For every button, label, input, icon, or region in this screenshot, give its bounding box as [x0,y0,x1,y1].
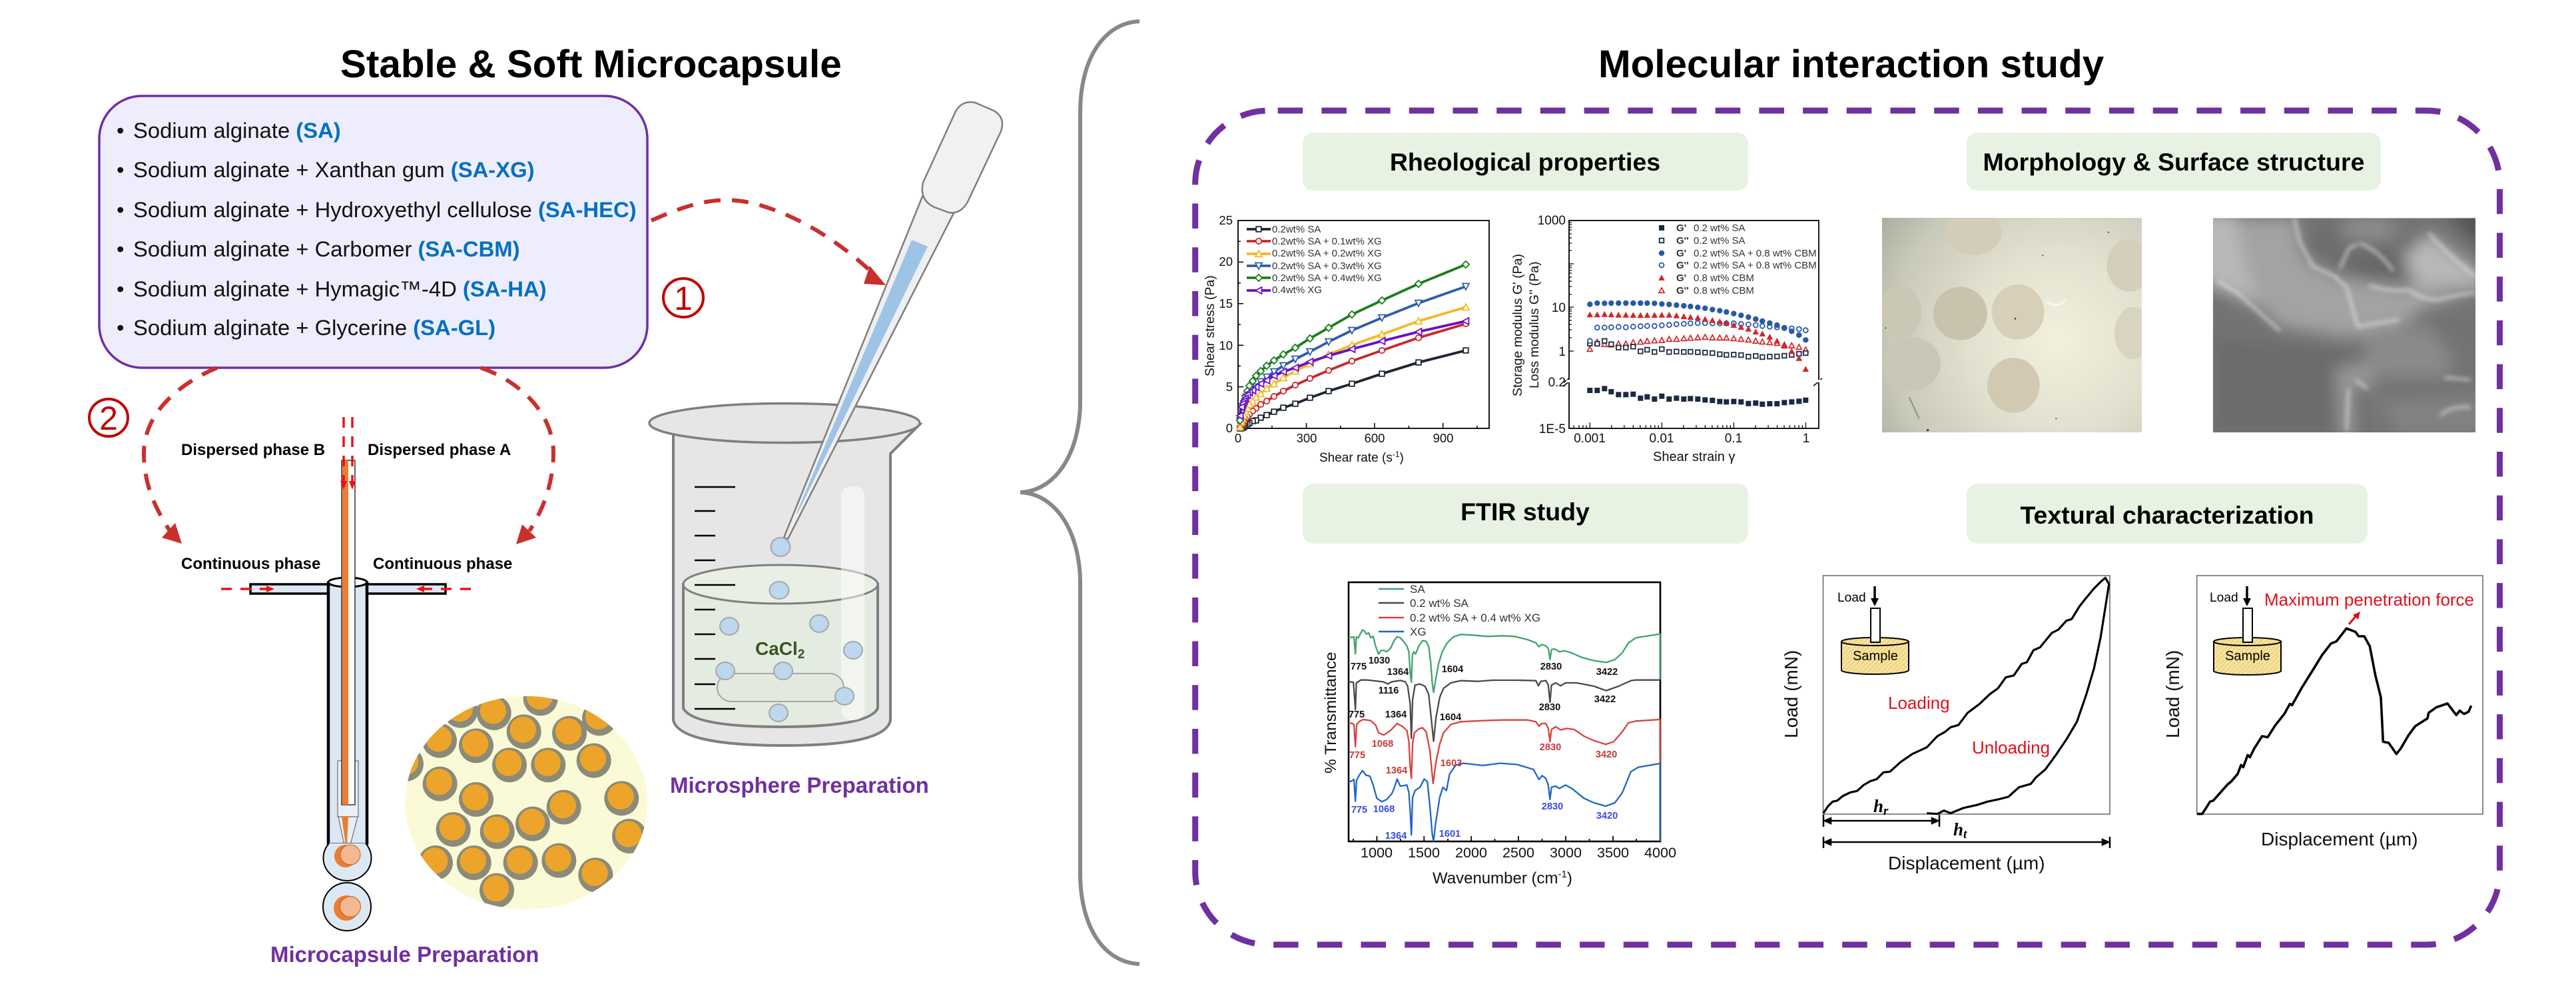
heading: FTIR study: FTIR study [1460,498,1590,526]
peak labels: red: 3420 [1596,749,1617,760]
peak labels: black: 1364 [1387,667,1409,678]
chart: FTIR spectra: 2000 [1455,844,1487,861]
axis label: shear rate: ) [1400,451,1404,465]
chart: FTIR spectra: 1000 [1361,844,1393,861]
chart: shear stress vs shear rate: 0 [1235,431,1241,445]
text block: sodium alginate formulations: • [117,237,124,261]
heading: rheological properties: Rheological properties [1390,148,1660,176]
legend: modulus series: G'' [1676,260,1689,271]
peak labels: black: 2830 [1540,662,1562,672]
label: calcium chloride: 2 [798,648,805,662]
label: loading: Loading [1888,693,1950,713]
chart: storage and loss modulus vs shear strain: 10 [1552,301,1566,315]
icon: circled number 1 [663,278,703,317]
chart: FTIR spectra: 3000 [1550,844,1582,861]
arrow: list to pipette [651,200,886,285]
chart: shear stress vs shear rate: 300 [1297,431,1317,445]
legend: shear stress series: 0.2wt% SA + 0.3wt% XG [1272,260,1382,272]
legend: modulus series: 0.2 wt% SA + 0.8 wt% CBM [1694,260,1817,271]
photo: optical micrograph of microspheres [1879,209,2152,432]
diagram: coaxial microfluidic device [181,417,512,931]
label: residual depth: h [1873,796,1883,816]
arrow: list to dispersed phase left [144,368,217,544]
chart: FTIR spectra: 1500 [1408,844,1440,861]
legend: shear stress series: 0.2wt% SA [1272,224,1321,235]
heading: microcapsule preparation: Microcapsule Preparation [270,942,539,967]
peak labels: black: 3422 [1596,667,1618,678]
legend: FTIR series: XG [1410,626,1427,638]
panel: formulation list [99,96,647,368]
text block: sodium alginate formulations: • [117,315,124,340]
chart: storage and loss modulus vs shear strain: 0.1 [1725,432,1742,446]
legend: modulus series: G' [1676,272,1686,284]
axis label: displacement: Displacement (µm) [1888,853,2045,873]
icon: load on sample, loading plot: Load [1837,591,1866,605]
legend: shear stress series [1247,224,1382,296]
icon: load on sample, loading plot: Sample [1853,649,1898,664]
chart: storage and loss modulus vs shear strain: 0.01 [1650,432,1674,446]
label: continuous phase left: Continuous phase [181,555,320,573]
legend: shear stress series: 0.4wt% XG [1272,284,1322,296]
legend: FTIR series: 0.2 wt% SA + 0.4 wt% XG [1410,612,1540,624]
photo: microcapsules micrograph [405,696,647,909]
text block: sodium alginate formulations: • [117,197,124,222]
axis label: loss modulus: Loss modulus G'' (Pa) [1527,261,1542,388]
axis label: load: Load (mN) [2162,650,2183,738]
chart: shear stress vs shear rate: 600 [1365,431,1385,445]
peak labels: red: 1068 [1372,739,1393,749]
axis label: displacement: Displacement (µm) [2261,829,2418,849]
chart: shear stress vs shear rate: 25 [1219,213,1233,227]
text block: sodium alginate formulations: Sodium alginate (SA) [133,118,341,143]
legend: shear stress series: 0.2wt% SA + 0.2wt% XG [1272,248,1382,259]
brace: connects left and right sections [1020,21,1139,964]
legend: modulus series: 0.8 wt% CBM [1694,272,1754,284]
peak labels: black: 1604 [1440,712,1462,723]
chart: storage and loss modulus vs shear strain: 1000 [1538,214,1566,228]
arrow: residual depth span [1823,815,1939,827]
axis label: shear rate: Shear rate (s [1319,451,1393,465]
icon: circled number 2: 2 [99,400,118,437]
legend: shear stress series: 0.2wt% SA + 0.1wt% XG [1272,236,1382,247]
chart: shear stress vs shear rate: 10 [1219,338,1233,352]
peak labels: black: 1030 [1369,656,1390,666]
chart: penetration force curve [2162,576,2483,849]
chart: loading and unloading curve [1781,576,2110,873]
chart: storage and loss modulus vs shear strain: 1E-5 [1539,422,1566,436]
diagram: beaker with calcium chloride bath [649,404,920,745]
text block: sodium alginate formulations: Sodium alginate + Xanthan gum (SA-XG) [133,157,535,182]
label: residual depth: r [1883,804,1889,818]
text block: sodium alginate formulations: • [117,118,124,143]
label: unloading: Unloading [1972,738,2050,757]
axis label: transmittance: % Transmittance [1322,652,1340,773]
heading: textural characterization: Textural characterization [2020,501,2314,529]
icon: circled number 2 [89,399,128,437]
photo: SEM surface micrograph [2213,218,2475,432]
chart: storage and loss modulus vs shear strain: 0.2 [1548,376,1566,390]
peak labels: blue: 1601 [1439,829,1460,839]
heading: FTIR study [1303,484,1748,544]
text block: sodium alginate formulations: Sodium alginate + Hydroxyethyl cellulose (SA-HEC) [133,197,637,222]
peak labels: red [1349,739,1617,776]
peak labels: red: 2830 [1540,742,1561,753]
legend: modulus series: 0.2 wt% SA + 0.8 wt% CBM [1694,248,1817,259]
peak labels: black [1349,656,1618,723]
peak labels: black: 2830 [1539,702,1560,713]
heading: rheological properties [1303,133,1748,191]
label: continuous phase right: Continuous phase [373,555,512,573]
peak labels: blue: 2830 [1542,801,1563,812]
axis label: storage modulus: Storage modulus G' (Pa) [1510,254,1525,396]
chart: shear stress vs shear rate: 900 [1433,431,1453,445]
peak labels: red: 1603 [1441,758,1462,769]
peak labels: black: 1364 [1385,710,1407,720]
icon: load on sample, loading plot [1837,586,1909,674]
axis label: wavenumber: Wavenumber (cm [1433,869,1558,887]
label: maximum penetration force: Maximum penetration force [2264,590,2474,610]
icon: released droplet [323,883,371,931]
chart: FTIR spectra: 3500 [1597,844,1629,861]
label: dispersed phase A: Dispersed phase A [368,441,511,459]
heading: textural characterization [1967,484,2368,544]
chart: storage and loss modulus vs shear strain: 1 [1558,345,1566,359]
icon: load on sample, penetration plot: Sample [2225,649,2270,664]
peak labels: black: 775 [1349,710,1365,720]
peak labels: black: 3422 [1594,694,1616,705]
legend: modulus series: G'' [1676,285,1689,296]
label: calcium chloride: CaCl [755,638,798,659]
panel: dashed border for molecular interaction study [1195,111,2500,945]
legend: shear stress series: 0.2wt% SA + 0.4wt% XG [1272,272,1382,284]
icon: load on sample, penetration plot: Load [2210,591,2238,605]
legend: modulus series: 0.2 wt% SA [1694,223,1746,234]
legend: modulus series: G'' [1676,235,1689,246]
axis label: wavenumber: -1 [1558,869,1567,880]
title: molecular interaction study: Molecular interaction study [1598,43,2104,86]
legend: modulus series: 0.8 wt% CBM [1694,285,1754,296]
legend: FTIR series: SA [1410,583,1425,596]
peak labels: blue: 1364 [1385,831,1407,841]
peak labels: black: 1116 [1379,686,1399,696]
peak labels: red: 775 [1349,750,1365,761]
icon: pipette [771,102,1002,556]
text block: sodium alginate formulations: Sodium alginate + Glycerine (SA-GL) [133,315,495,340]
peak labels: blue [1351,801,1618,841]
chart: shear stress vs shear rate: 0 [1226,421,1233,435]
legend: FTIR series: 0.2 wt% SA [1410,597,1469,610]
legend: modulus series: G' [1676,248,1686,259]
chart: storage and loss modulus vs shear strain: 1 [1803,432,1809,446]
chart: shear stress vs shear rate: 15 [1219,296,1233,310]
axis label: load: Load (mN) [1781,650,1801,738]
text block: sodium alginate formulations: Sodium alginate + Carbomer (SA-CBM) [133,237,520,261]
text block: sodium alginate formulations: • [117,157,124,182]
axis label: shear strain: Shear strain γ [1653,450,1735,464]
text block: sodium alginate formulations: • [117,276,124,301]
peak labels: black: 1604 [1442,664,1464,675]
heading: morphology and surface structure: Morphology & Surface structure [1983,148,2364,176]
arrow: list to dispersed phase right [481,368,553,544]
icon: circled number 1: 1 [674,280,693,317]
axis label: shear rate: -1 [1393,450,1400,459]
icon: load on sample, penetration plot [2210,586,2281,675]
peak labels: blue: 3420 [1596,811,1618,821]
chart: storage and loss modulus vs shear strain [1510,214,1822,464]
chart: shear stress vs shear rate: 20 [1219,254,1233,268]
arrow: total depth span [1823,837,2110,848]
legend: modulus series: G' [1676,223,1686,234]
arrow: points to peak [2349,612,2360,624]
axis label: wavenumber: ) [1567,869,1572,887]
heading: microsphere preparation: Microsphere Preparation [670,773,929,797]
chart: FTIR spectra [1322,582,1676,887]
icon: stir bar [717,674,844,702]
text block: sodium alginate formulations: Sodium alginate + Hymagic™-4D (SA-HA) [133,276,547,301]
heading: morphology and surface structure [1967,133,2381,191]
label: total depth: t [1963,827,1967,841]
legend: FTIR series [1379,583,1540,638]
icons: alginate droplets [716,582,862,722]
chart: shear stress vs shear rate: 5 [1226,380,1233,394]
legend: modulus series: 0.2 wt% SA [1694,235,1746,246]
label: total depth: h [1953,819,1963,839]
peak labels: blue: 775 [1351,805,1367,815]
label: dispersed phase B: Dispersed phase B [181,441,325,459]
peak labels: black: 775 [1351,662,1367,672]
legend: modulus series [1662,223,1817,296]
axis label: shear stress: Shear stress (Pa) [1203,275,1217,376]
chart: FTIR spectra: 4000 [1644,844,1676,861]
peak labels: red: 1364 [1386,765,1408,776]
title: stable and soft microcapsule: Stable & Soft Microcapsule [340,43,842,86]
chart: FTIR spectra: 2500 [1502,844,1534,861]
icon: forming droplet [323,843,372,881]
chart: storage and loss modulus vs shear strain: 0.001 [1574,432,1606,446]
chart: shear stress vs shear rate [1203,213,1489,465]
peak labels: blue: 1068 [1373,804,1395,815]
